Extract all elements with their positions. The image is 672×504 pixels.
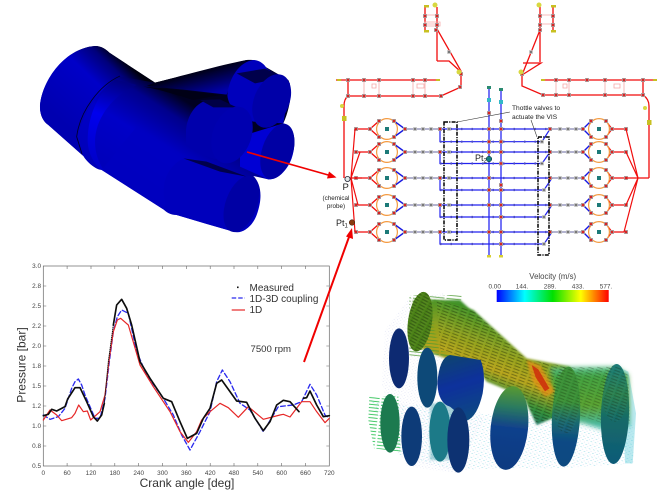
x axis tick labels: 120: [86, 470, 97, 477]
downstream green flow: [550, 367, 630, 430]
lower nozzle: [164, 157, 266, 237]
x axis tick labels: 540: [252, 470, 264, 477]
x axis tick labels: 300: [157, 470, 168, 477]
upper nozzle: [227, 60, 299, 134]
left outer lines: [336, 7, 461, 178]
y axis tick labels: 1.8: [32, 363, 41, 370]
colour bar: [497, 290, 609, 302]
teal low flow: [430, 403, 463, 460]
pipe cross-sections: [380, 290, 631, 473]
central pipe markers: [487, 86, 503, 258]
right collector fan: [624, 129, 649, 232]
point Pt1: Pt: [336, 218, 345, 228]
legend ticks: 0.00: [488, 284, 501, 290]
point Pt2: 2: [484, 158, 488, 164]
x axis tick labels: 720: [324, 470, 335, 477]
probe P and labels: [323, 176, 350, 210]
right outer pink links: [540, 15, 624, 95]
data curves: [43, 299, 329, 450]
y axis tick labels: 3.0: [32, 263, 41, 270]
upper left green flow: [409, 295, 483, 367]
y axis tick labels: 2.2: [32, 323, 41, 330]
legend ticks: 577.: [600, 284, 612, 290]
x axis tick labels: 180: [109, 470, 121, 477]
point Pt2: Pt: [475, 153, 484, 163]
main diagonal flow band: [433, 300, 580, 425]
right edge cyan arrows: [622, 368, 636, 463]
x axis tick labels: [42, 470, 335, 477]
point Pt1: 1: [345, 224, 349, 230]
plot frame: [43, 266, 329, 466]
runner row 3: [354, 168, 628, 192]
probe P and labels: (chemical: [323, 195, 349, 202]
middle nozzle: [186, 99, 260, 169]
right outer lines: [522, 7, 657, 178]
throttle valves callout: actuate the VIS: [512, 114, 558, 121]
probe P and labels: P: [342, 182, 349, 193]
legend ticks: 289.: [544, 284, 556, 290]
legend: 1D: [250, 305, 262, 316]
rpm label: 7500 rpm: [250, 344, 291, 355]
lower left green inlet: [368, 396, 401, 452]
low speed dotted regions: [370, 293, 633, 473]
x axis tick labels: 60: [64, 470, 71, 477]
left outer pink links: [364, 15, 440, 96]
left collector fan: [347, 129, 362, 232]
legend: Measured: [250, 283, 294, 294]
throttle valve boxes: [444, 122, 549, 255]
y axis tick labels: 1.0: [32, 423, 41, 430]
high speed hot spot: [527, 360, 555, 397]
y axis tick labels: 1.2: [32, 403, 41, 410]
right nozzle: [240, 119, 301, 183]
x axis tick labels: 0: [42, 470, 46, 477]
runner row 5: [354, 222, 628, 246]
red arrow: model to probe: [247, 152, 336, 178]
x axis tick labels: 480: [229, 470, 240, 477]
legend ticks: 144.: [516, 284, 528, 290]
y axis tick labels: 2.8: [32, 283, 41, 290]
x axis tick labels: 420: [205, 470, 216, 477]
pipe network schematic: [336, 2, 657, 258]
point Pt1: [336, 218, 355, 230]
3D manifold model (blue): [40, 46, 301, 237]
x axis tick labels: 600: [276, 470, 287, 477]
x axis tick labels: 240: [133, 470, 144, 477]
x axis tick labels: 660: [300, 470, 311, 477]
velocity field 3D view: [368, 290, 636, 473]
y axis tick labels: 1.5: [32, 383, 41, 390]
legend ticks: 433.: [572, 284, 584, 290]
y axis tick labels: [32, 263, 41, 470]
y axis tick labels: 2.0: [32, 343, 41, 350]
runner row 4: [354, 195, 628, 219]
legend: [232, 283, 318, 316]
velocity colour bar legend: [488, 272, 612, 302]
y axis tick labels: 0.5: [32, 463, 41, 470]
legend: 1D-3D coupling: [250, 294, 318, 305]
x axis tick labels: 360: [181, 470, 192, 477]
legend ticks: [488, 284, 612, 290]
legend title: Velocity (m/s): [529, 272, 576, 281]
red arrow: chart to Pt1: [304, 228, 353, 362]
throttle valves callout: [457, 105, 560, 137]
central vertical blue pipes: [489, 86, 501, 256]
pressure chart: [14, 263, 335, 490]
point Pt2: [475, 153, 492, 164]
throttle valves callout: Thottle valves to: [512, 105, 560, 112]
y axis tick labels: 2.5: [32, 303, 41, 310]
probe P and labels: probe): [327, 203, 345, 210]
runner row 2: [354, 142, 628, 166]
y axis title: Pressure [bar]: [14, 327, 28, 403]
runner row 1: [354, 119, 628, 144]
outer line nodes: [337, 2, 657, 125]
y axis tick labels: 0.8: [32, 443, 41, 450]
x axis title: Crank angle [deg]: [140, 476, 234, 490]
